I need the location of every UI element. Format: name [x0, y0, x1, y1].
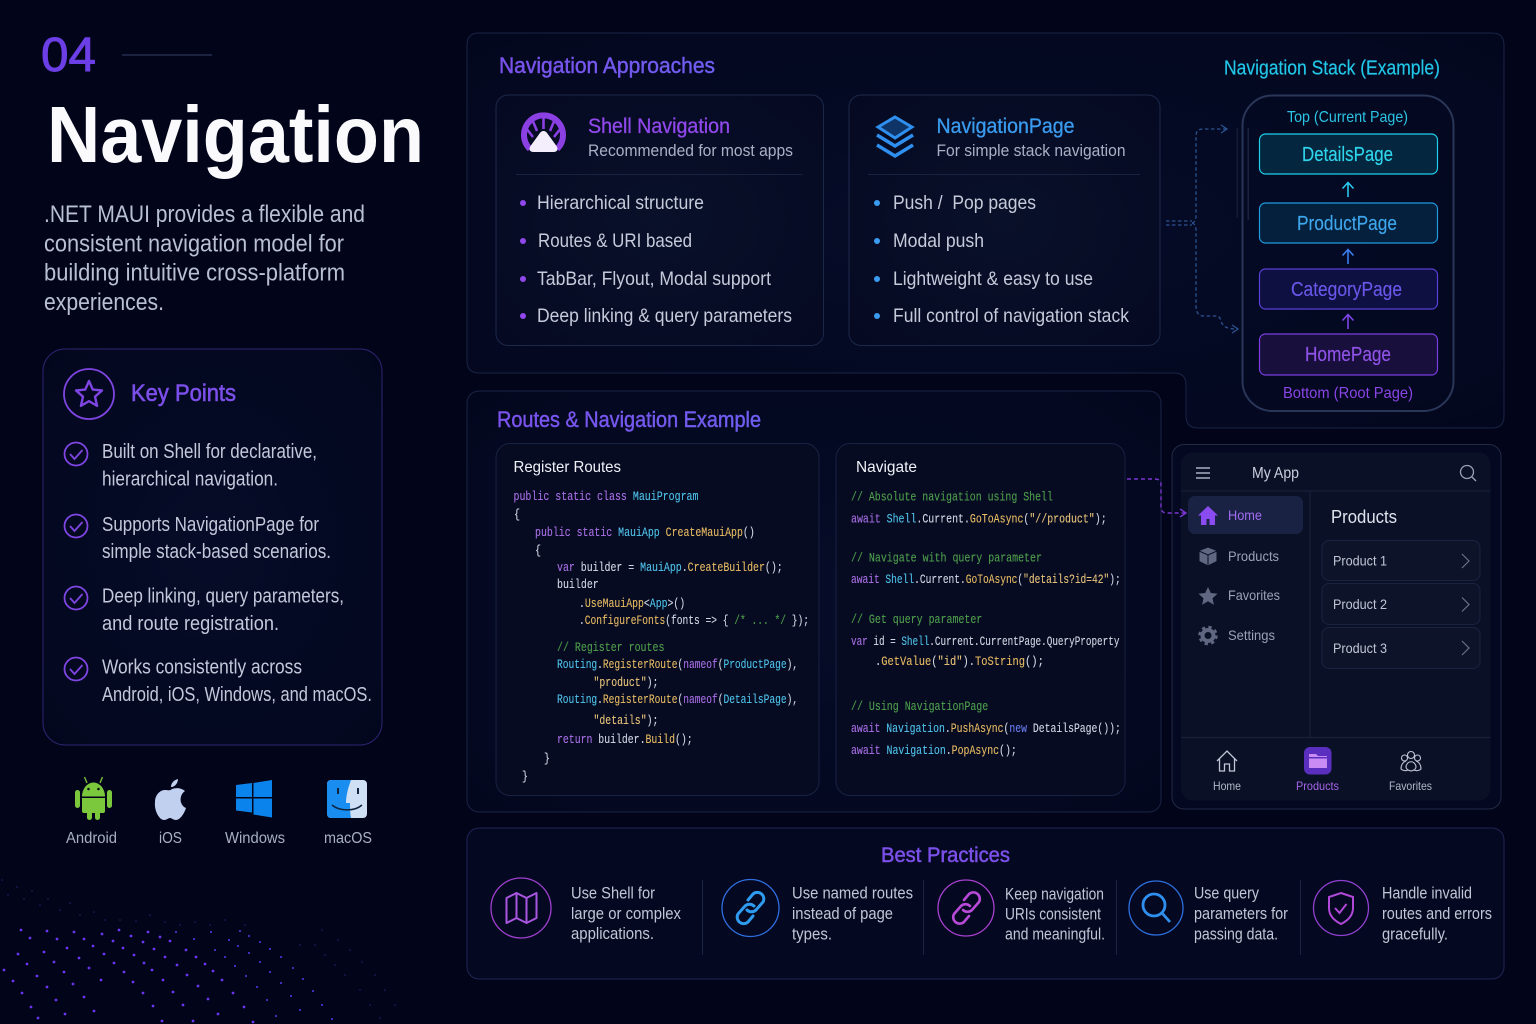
- sidebar item: home: [1188, 496, 1303, 534]
- practice: named routes: types.: [792, 926, 832, 944]
- icon: search: [1460, 466, 1476, 481]
- code heading: Navigate: [856, 459, 917, 476]
- code listing: // Navigate with query parameter: [851, 551, 1042, 566]
- icon: android: [75, 777, 112, 820]
- stack item: homepage: [1260, 334, 1438, 375]
- panel: routes and navigation example: [467, 391, 1161, 812]
- arrow: [1342, 314, 1354, 329]
- arrow: [1342, 250, 1354, 264]
- practice: query parameters: [1129, 881, 1288, 944]
- code listing: .UseMauiApp<App>(): [579, 597, 685, 612]
- stack item: categorypage: [1260, 269, 1438, 309]
- key point 1: [64, 441, 317, 490]
- key point 2: [64, 514, 331, 563]
- sidebar item: products: [1199, 547, 1279, 566]
- heading: navigation stack: Navigation Stack (Example): [1224, 58, 1440, 80]
- dashed connector to app: [1127, 479, 1186, 517]
- sidebar item: favorites: [1198, 587, 1280, 605]
- rule: [122, 54, 212, 56]
- code card: navigate: [836, 444, 1125, 796]
- code listing: await Navigation.PushAsync(new DetailsPage());: [851, 722, 1121, 737]
- row: product 1: Product 1: [1333, 552, 1387, 568]
- code listing: {: [535, 544, 541, 558]
- key point 4: Works consistently across: [102, 656, 302, 678]
- row: product 3: Product 3: [1333, 640, 1387, 656]
- key point 2: simple stack-based scenarios.: [102, 541, 331, 563]
- feature list: Hierarchical structure: [537, 192, 704, 214]
- section header: [41, 29, 424, 316]
- practice: named routes: [722, 880, 913, 944]
- key point 1: Built on Shell for declarative,: [102, 441, 317, 463]
- practice: use shell: Use Shell for: [571, 884, 655, 902]
- label: android: Android: [66, 830, 117, 847]
- app window: [1181, 452, 1490, 800]
- key point 1: hierarchical navigation.: [102, 468, 278, 490]
- practice: handle errors: gracefully.: [1382, 926, 1448, 944]
- label: windows: Windows: [225, 830, 285, 847]
- platform icons: [66, 777, 372, 847]
- code card: register routes: [496, 444, 819, 796]
- sidebar item: products: Products: [1228, 548, 1279, 564]
- feature list: Modal push: [893, 230, 984, 252]
- code listing: public static MauiApp CreateMauiApp(): [535, 526, 755, 540]
- dashed connector to stack: [1166, 125, 1238, 333]
- sidebar item: settings: Settings: [1228, 627, 1275, 643]
- panel: app preview: [1172, 444, 1501, 809]
- code listing: "product");: [594, 676, 658, 691]
- feature list: Lightweight & easy to use: [893, 268, 1093, 290]
- feature list: [520, 192, 792, 327]
- tab: favorites: [1389, 752, 1432, 793]
- code listing: }: [544, 752, 550, 766]
- practice: query parameters: parameters for: [1194, 905, 1288, 923]
- content heading: Products: [1331, 507, 1397, 527]
- panel: key points: [43, 349, 382, 745]
- navigation stack diagram: [1242, 96, 1454, 411]
- row: product 2: [1322, 584, 1480, 624]
- icon: apple: [155, 779, 186, 820]
- feature list: Routes & URI based: [538, 230, 692, 252]
- section number: 04: [41, 29, 96, 82]
- code listing: }: [522, 770, 528, 784]
- row: product 3: [1322, 628, 1480, 668]
- icon: menu: [1196, 468, 1210, 478]
- practice: query parameters: passing data.: [1194, 926, 1278, 944]
- code listing: await Navigation.PopAsync();: [851, 744, 1017, 759]
- key point 3: [64, 586, 344, 635]
- app title: My App: [1252, 465, 1299, 482]
- heading: best practices: Best Practices: [881, 844, 1010, 867]
- row: product 1: [1322, 540, 1480, 580]
- practice: handle errors: routes and errors: [1382, 905, 1492, 923]
- code listing: {: [514, 508, 520, 522]
- panel: navigation approaches: [467, 33, 1504, 428]
- stack item: productpage: [1260, 203, 1438, 243]
- label: top: Top (Current Page): [1287, 109, 1408, 126]
- code listing: public static class MauiProgram: [514, 490, 699, 504]
- tab: home: [1213, 751, 1241, 793]
- key point 3: and route registration.: [102, 613, 279, 635]
- practice: named routes: instead of page: [792, 905, 893, 923]
- arrow: [1342, 182, 1354, 197]
- stack item: categorypage: CategoryPage: [1291, 279, 1402, 301]
- feature list: TabBar, Flyout, Modal support: [537, 268, 772, 290]
- icon: windows: [236, 780, 272, 818]
- code listing: // Get query parameter: [851, 613, 982, 627]
- sidebar item: favorites: Favorites: [1228, 587, 1280, 603]
- code listing: [514, 490, 809, 784]
- practice: consistent uris: Keep navigation: [1005, 886, 1104, 904]
- panel: best practices: [467, 828, 1504, 979]
- row: product 2: Product 2: [1333, 596, 1387, 612]
- practice: handle errors: [1314, 880, 1492, 944]
- feature list: Push / Pop pages: [893, 192, 1036, 214]
- intro paragraph: building intuitive cross-platform: [44, 260, 345, 286]
- code listing: var builder = MauiApp.CreateBuilder();: [557, 561, 783, 575]
- intro paragraph: consistent navigation model for: [44, 230, 344, 258]
- key point 3: Deep linking, query parameters,: [102, 586, 344, 608]
- heading: navigation approaches: Navigation Approaches: [499, 53, 715, 78]
- practice: use shell: [491, 878, 682, 943]
- stack item: productpage: ProductPage: [1297, 213, 1397, 235]
- code listing: "details");: [594, 714, 658, 729]
- card: navigationpage: [849, 95, 1160, 346]
- stack item: homepage: HomePage: [1305, 344, 1391, 366]
- card: shell navigation: [496, 95, 824, 346]
- icon: layers: [877, 117, 913, 156]
- tab: favorites: Favorites: [1389, 779, 1432, 793]
- tab: home: Home: [1213, 779, 1241, 793]
- intro paragraph: [44, 201, 365, 316]
- code listing: // Using NavigationPage: [851, 700, 988, 714]
- label: ios: iOS: [159, 830, 182, 847]
- heading: key points: Key Points: [131, 380, 236, 407]
- key point 4: Android, iOS, Windows, and macOS.: [102, 684, 372, 706]
- code heading: Register Routes: [514, 459, 621, 476]
- practice: consistent uris: and meaningful.: [1005, 926, 1105, 944]
- practice: use shell: applications.: [571, 925, 654, 943]
- key point 2: Supports NavigationPage for: [102, 514, 319, 536]
- icon: shell: [524, 115, 563, 152]
- practice: named routes: Use named routes: [792, 884, 913, 902]
- practice: consistent uris: [938, 880, 1105, 944]
- title: Navigation: [47, 90, 424, 179]
- sidebar item: settings: [1200, 627, 1275, 644]
- heading: routes: Routes & Navigation Example: [497, 407, 761, 432]
- sidebar item: home: Home: [1228, 507, 1262, 523]
- code listing: Routing.RegisterRoute(nameof(DetailsPage),: [557, 694, 798, 708]
- code listing: .GetValue("id").ToString();: [875, 654, 1044, 669]
- feature list: [874, 192, 1129, 327]
- intro paragraph: .NET MAUI provides a flexible and: [44, 201, 365, 228]
- decorative dot wave: [2, 880, 395, 1022]
- label: bottom: Bottom (Root Page): [1283, 385, 1413, 402]
- code listing: return builder.Build();: [557, 733, 693, 748]
- subtitle: For simple stack navigation: [936, 141, 1126, 160]
- code listing: .ConfigureFonts(fonts => { /* ... */ });: [579, 614, 809, 629]
- heading: shell navigation: Shell Navigation: [588, 115, 730, 138]
- code listing: builder: [557, 578, 599, 592]
- practice: query parameters: Use query: [1194, 884, 1260, 902]
- key point 4: [64, 656, 372, 706]
- code listing: [851, 490, 1121, 759]
- code listing: // Absolute navigation using Shell: [851, 490, 1053, 505]
- icon: macos finder: [327, 780, 367, 818]
- code listing: await Shell.Current.GoToAsync("//product");: [851, 512, 1107, 527]
- icon: star: [64, 369, 114, 419]
- code listing: // Register routes: [557, 641, 664, 655]
- tab: products: [1296, 747, 1339, 793]
- intro paragraph: experiences.: [44, 289, 164, 316]
- tab: products: Products: [1296, 779, 1339, 793]
- code listing: Routing.RegisterRoute(nameof(ProductPage),: [557, 659, 798, 673]
- stack item: detailspage: [1260, 134, 1438, 174]
- code listing: await Shell.Current.GoToAsync("details?id=42");: [851, 574, 1121, 588]
- feature list: Full control of navigation stack: [893, 305, 1129, 327]
- practice: consistent uris: URIs consistent: [1005, 906, 1101, 924]
- label: macos: macOS: [324, 830, 372, 847]
- feature list: Deep linking & query parameters: [537, 305, 792, 327]
- heading: navigationpage: NavigationPage: [936, 115, 1074, 138]
- practice: use shell: large or complex: [571, 905, 682, 923]
- stack item: detailspage: DetailsPage: [1302, 144, 1393, 166]
- practice: handle errors: Handle invalid: [1382, 884, 1472, 902]
- subtitle: Recommended for most apps: [588, 141, 793, 160]
- code listing: var id = Shell.Current.CurrentPage.QueryProperty: [851, 636, 1120, 650]
